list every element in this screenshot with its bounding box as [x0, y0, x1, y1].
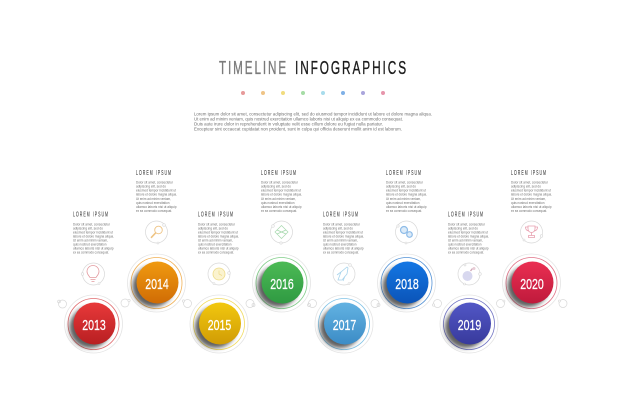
text block 2016: adipiscing elit, sed do: [261, 185, 291, 189]
text block 2019: Dolor sit amet, consectetur: [448, 222, 486, 226]
text block 2014: eiusmod tempor incididunt ut: [136, 189, 177, 193]
text block 2019: adipiscing elit, sed do: [448, 226, 478, 230]
text block 2018: Ut enim ad minim veniam,: [386, 197, 421, 201]
icon: envelope: [270, 221, 292, 244]
text block 2015: [198, 222, 239, 255]
text block 2014: quis nostrud exercitation: [136, 201, 170, 205]
text block 2015: eiusmod tempor incididunt ut: [198, 230, 239, 234]
text block 2018: adipiscing elit, sed do: [386, 185, 416, 189]
text block 2020: eiusmod tempor incididunt ut: [511, 189, 552, 193]
year badge 2020: 2020: [520, 276, 544, 293]
text block 2018: ex ea commodo consequat.: [386, 209, 422, 213]
heading 2014: LOREM IPSUM: [136, 170, 172, 177]
panel: 2014: [128, 170, 192, 312]
year badge 2013: [64, 295, 122, 353]
text block 2013: Ut enim ad minim veniam,: [73, 238, 108, 242]
year badge 2015: 2015: [208, 317, 231, 334]
text block 2013: eiusmod tempor incididunt ut: [73, 230, 114, 234]
year badge 2019: [440, 295, 498, 353]
connector ring: [496, 300, 505, 308]
intro text: Duis aute irure dolor in reprehenderit in voluptate velit esse cillum dolore eu fugiat nulla pariatur.: [194, 122, 383, 126]
text block 2020: ex ea commodo consequat.: [511, 209, 547, 213]
year badge 2018: 2018: [395, 276, 419, 293]
text block 2016: [261, 181, 302, 213]
heading 2015: LOREM IPSUM: [198, 212, 234, 218]
text block 2019: labore et dolore magna aliqua.: [448, 234, 489, 238]
text block 2016: quis nostrud exercitation: [261, 201, 294, 205]
connector rings: [58, 299, 130, 308]
icon: trophy: [520, 221, 543, 243]
heading 2018: LOREM IPSUM: [386, 170, 422, 177]
connector ring: [246, 300, 255, 308]
year badge 2020: [502, 254, 560, 312]
text block 2017: quis nostrud exercitation: [323, 242, 356, 246]
heading 2016: LOREM IPSUM: [261, 170, 297, 177]
year badge 2014: 2014: [145, 276, 169, 293]
text block 2016: labore et dolore magna aliqua.: [261, 193, 302, 197]
panel: 2016: [252, 170, 316, 312]
title: TIMELINE: [219, 57, 288, 78]
panel: 2017: [315, 212, 380, 353]
text block 2014: [136, 181, 177, 213]
connector ring: [182, 300, 192, 308]
intro text: Excepteur sint occaecat cupidatat non proident, sunt in culpa qui officia deserunt mollit anim id est laborum.: [194, 126, 402, 132]
connector ring: [432, 300, 442, 308]
text block 2014: Ut enim ad minim veniam,: [136, 197, 171, 201]
text block 2018: ullamco laboris nisi ut aliquip: [386, 205, 426, 209]
text block 2018: quis nostrud exercitation: [386, 201, 420, 205]
text block 2017: adipiscing elit, sed do: [323, 226, 353, 230]
text block 2014: adipiscing elit, sed do: [136, 185, 166, 189]
text block 2020: labore et dolore magna aliqua.: [511, 193, 552, 197]
coloured dots row: [241, 91, 385, 95]
intro text: Ut enim ad minim veniam, quis nostrud exercitation ullamco laboris nisi ut aliquip ex ea commodo consequat.: [194, 116, 403, 122]
year badge 2019: 2019: [458, 317, 481, 334]
year badge 2017: 2017: [333, 317, 356, 334]
text block 2019: [448, 222, 489, 255]
text block 2014: ex ea commodo consequat.: [136, 209, 172, 213]
text block 2015: Dolor sit amet, consectetur: [198, 222, 236, 226]
text block 2019: Ut enim ad minim veniam,: [448, 238, 483, 242]
icon: bomb: [458, 263, 481, 285]
connector ring: [308, 300, 316, 308]
panel: 2019: [440, 212, 505, 353]
text block 2013: ullamco laboris nisi ut aliquip: [73, 247, 114, 251]
year badge 2016: [252, 254, 310, 312]
panel: 2015: [190, 212, 255, 353]
text block 2016: ullamco laboris nisi ut aliquip: [261, 205, 302, 209]
text block 2014: ullamco laboris nisi ut aliquip: [136, 205, 176, 209]
text block 2018: labore et dolore magna aliqua.: [386, 193, 427, 197]
text block 2017: eiusmod tempor incididunt ut: [323, 230, 364, 234]
text block 2019: eiusmod tempor incididunt ut: [448, 230, 489, 234]
connector ring: [371, 300, 380, 308]
icon: clock: [208, 263, 230, 285]
text block 2017: [323, 222, 364, 255]
text block 2017: ullamco laboris nisi ut aliquip: [323, 247, 364, 251]
text block 2016: ex ea commodo consequat.: [261, 209, 297, 213]
panel: 2013: [58, 212, 130, 353]
text block 2017: labore et dolore magna aliqua.: [323, 234, 364, 238]
icon: magnifier: [146, 221, 168, 244]
text block 2015: Ut enim ad minim veniam,: [198, 238, 233, 242]
icon: rocket: [333, 263, 355, 285]
text block 2020: Dolor sit amet, consectetur: [511, 181, 549, 185]
title: INFOGRAPHICS: [295, 57, 408, 78]
text block 2014: Dolor sit amet, consectetur: [136, 181, 174, 185]
text block 2015: ullamco laboris nisi ut aliquip: [198, 247, 238, 251]
text block 2018: [386, 181, 427, 213]
text block 2016: Dolor sit amet, consectetur: [261, 181, 299, 185]
text block 2015: quis nostrud exercitation: [198, 242, 232, 246]
icon: light bulb: [81, 263, 104, 285]
text block 2013: quis nostrud exercitation: [73, 242, 106, 246]
text block 2017: Dolor sit amet, consectetur: [323, 222, 361, 226]
text block 2013: labore et dolore magna aliqua.: [73, 234, 114, 238]
text block 2015: labore et dolore magna aliqua.: [198, 234, 239, 238]
intro text: Lorem ipsum dolor sit amet, consectetur adipiscing elit, sed do eiusmod tempor incididunt ut labore et dolore magna aliqua.: [194, 112, 432, 116]
intro text: [194, 112, 432, 132]
text block 2018: eiusmod tempor incididunt ut: [386, 189, 427, 193]
text block 2019: quis nostrud exercitation: [448, 242, 482, 246]
text block 2020: adipiscing elit, sed do: [511, 185, 541, 189]
text block 2018: Dolor sit amet, consectetur: [386, 181, 424, 185]
heading 2013: LOREM IPSUM: [73, 212, 109, 218]
year badge 2014: [128, 254, 186, 312]
icon: gears: [396, 221, 418, 244]
text block 2017: ex ea commodo consequat.: [323, 251, 359, 255]
text block 2019: ullamco laboris nisi ut aliquip: [448, 247, 488, 251]
text block 2013: [73, 222, 114, 255]
text block 2020: Ut enim ad minim veniam,: [511, 197, 546, 201]
year badge 2016: 2016: [270, 276, 294, 293]
text block 2016: Ut enim ad minim veniam,: [261, 197, 296, 201]
text block 2013: ex ea commodo consequat.: [73, 251, 109, 255]
panel: 2018: [378, 170, 442, 312]
title: [219, 57, 408, 78]
year badge 2017: [315, 295, 373, 353]
connector ring: [558, 300, 567, 308]
text block 2015: adipiscing elit, sed do: [198, 226, 228, 230]
heading 2017: LOREM IPSUM: [323, 212, 359, 218]
text block 2019: ex ea commodo consequat.: [448, 251, 484, 255]
year badge 2018: [378, 254, 436, 312]
text block 2017: Ut enim ad minim veniam,: [323, 238, 358, 242]
heading 2019: LOREM IPSUM: [448, 212, 484, 218]
text block 2020: ullamco laboris nisi ut aliquip: [511, 205, 552, 209]
heading 2020: LOREM IPSUM: [511, 170, 547, 177]
panel: 2020: [502, 170, 567, 312]
text block 2014: labore et dolore magna aliqua.: [136, 193, 177, 197]
text block 2013: Dolor sit amet, consectetur: [73, 222, 111, 226]
year badge 2013: 2013: [82, 317, 106, 334]
year badge 2015: [190, 295, 248, 353]
text block 2013: adipiscing elit, sed do: [73, 226, 103, 230]
text block 2020: [511, 181, 552, 213]
text block 2020: quis nostrud exercitation: [511, 201, 544, 205]
text block 2015: ex ea commodo consequat.: [198, 251, 234, 255]
text block 2016: eiusmod tempor incididunt ut: [261, 189, 302, 193]
